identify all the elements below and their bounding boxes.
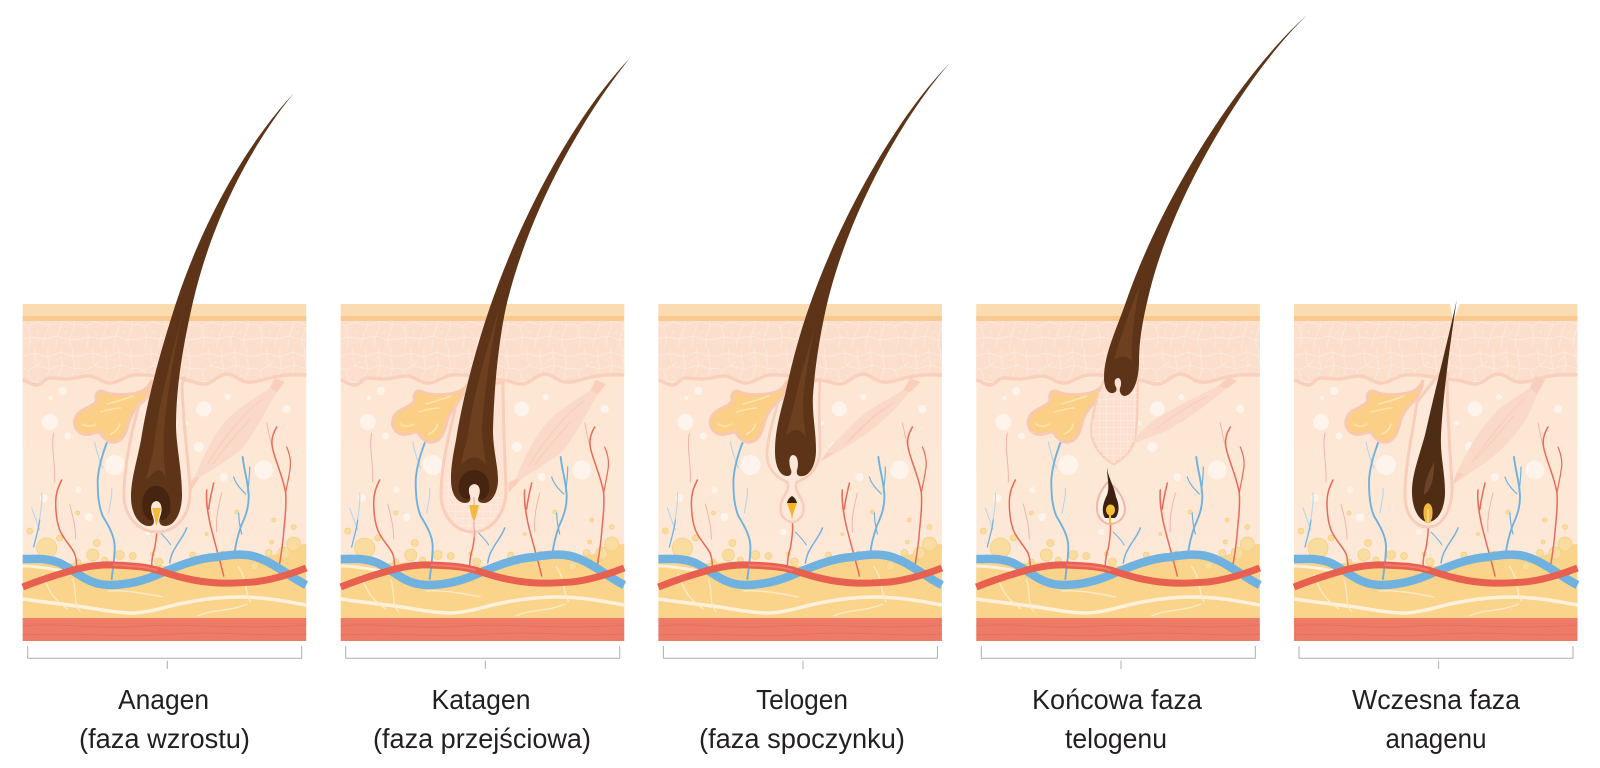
arrector pili muscle xyxy=(509,380,606,493)
panel: wczesna faza anagenu xyxy=(1294,300,1578,641)
follicle sheath xyxy=(1405,373,1452,527)
blood vessels xyxy=(1294,423,1578,587)
panel: anagen xyxy=(23,93,306,641)
label: końcowa faza telogenu: telogenu xyxy=(1065,723,1167,754)
label: katagen xyxy=(373,684,591,754)
bracket: wczesna faza anagenu xyxy=(1299,646,1573,669)
sebaceous gland xyxy=(1346,380,1423,442)
dormant papilla xyxy=(787,496,797,520)
label: telogen: Telogen xyxy=(756,684,848,715)
label: telogen: (faza spoczynku) xyxy=(699,723,905,754)
label: telogen xyxy=(699,684,905,754)
follicle sheath with detached club xyxy=(767,380,820,522)
new follicle sheath xyxy=(1097,482,1125,524)
panel: katagen xyxy=(341,58,630,641)
sebaceous gland xyxy=(393,380,470,442)
label: anagen: Anagen xyxy=(118,684,209,715)
regressing follicle sheath xyxy=(441,383,506,532)
sebaceous gland xyxy=(1028,380,1105,442)
panel: telogen xyxy=(658,63,950,641)
label: końcowa faza telogenu: Końcowa faza xyxy=(1032,684,1202,715)
arrector pili muscle xyxy=(820,378,920,462)
hair shaft and bulb xyxy=(451,58,630,538)
empty follicle xyxy=(1091,375,1138,464)
label: katagen: Katagen xyxy=(432,684,530,715)
blood vessels xyxy=(658,423,942,587)
label: wczesna faza anagenu xyxy=(1352,684,1520,754)
label: wczesna faza anagenu: anagenu xyxy=(1386,723,1486,754)
label: katagen: (faza przejściowa) xyxy=(373,723,591,754)
label: anagen xyxy=(79,684,250,754)
skin cross-section xyxy=(1294,304,1578,641)
sebaceous gland xyxy=(710,380,787,442)
hair shaft and bulb xyxy=(131,93,294,526)
new hair germ xyxy=(1103,467,1119,524)
panel: końcowa faza telogenu xyxy=(976,15,1307,641)
bracket: końcowa faza telogenu xyxy=(981,646,1255,669)
bracket: anagen xyxy=(28,646,302,669)
bracket: telogen xyxy=(663,646,937,669)
hair shaft shedding xyxy=(1104,15,1307,396)
follicle sheath xyxy=(124,378,190,532)
bracket: katagen xyxy=(346,646,620,669)
label: wczesna faza anagenu: Wczesna faza xyxy=(1352,684,1520,715)
label: końcowa faza telogenu xyxy=(1032,684,1202,754)
sebaceous gland xyxy=(75,380,152,442)
skin cross-section xyxy=(658,304,942,641)
skin opening xyxy=(1450,303,1460,322)
arrector pili muscle xyxy=(190,378,285,493)
arrector pili muscle xyxy=(1452,376,1545,485)
skin cross-section xyxy=(341,304,624,641)
blood vessels xyxy=(23,423,306,587)
blood vessels xyxy=(341,423,624,587)
hair shaft and bulb xyxy=(775,63,950,476)
skin cross-section xyxy=(976,304,1260,641)
new hair xyxy=(1412,300,1457,523)
blood vessels xyxy=(976,423,1260,587)
arrector pili muscle xyxy=(1132,377,1237,444)
label: anagen: (faza wzrostu) xyxy=(79,723,250,754)
skin cross-section xyxy=(23,304,306,641)
